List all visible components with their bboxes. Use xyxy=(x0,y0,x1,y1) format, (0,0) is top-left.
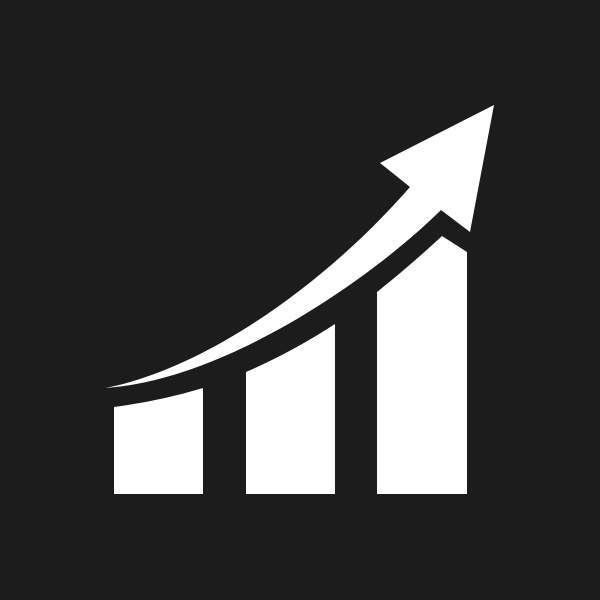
bar 1 xyxy=(114,388,203,494)
bar 2 xyxy=(246,324,335,494)
bar chart xyxy=(114,236,467,494)
bar 3 xyxy=(377,236,467,494)
arrow xyxy=(105,105,494,388)
